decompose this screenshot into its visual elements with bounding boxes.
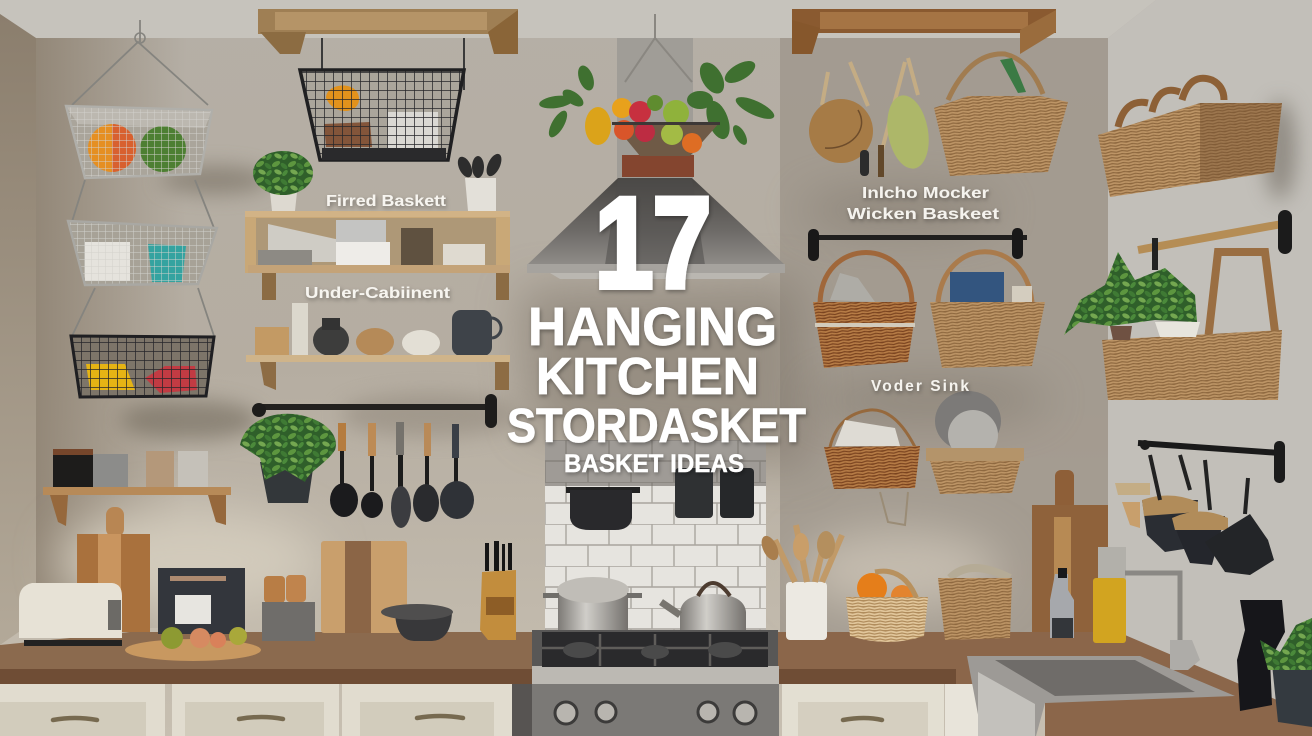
upper wooden wall shelf with dishes (245, 211, 510, 300)
wooden countertop (0, 632, 1312, 736)
toaster and appliances (19, 568, 315, 646)
main title: KITCHEN (536, 348, 759, 406)
wooden ceiling shelf right (792, 9, 1056, 54)
steel stock pot and kettle (543, 577, 746, 640)
black rail with two wicker baskets (808, 228, 1045, 368)
right wall rail with hanging pots (1115, 440, 1285, 575)
black pitcher and potted plant (1237, 600, 1312, 727)
black utensil rail with tools (252, 394, 497, 528)
cream lower cabinets (0, 684, 980, 736)
text label: fired basket: Firred Baskett (326, 193, 446, 210)
text label: inlcho mocker wicken baskeet: Wicken Baskeet (847, 206, 999, 223)
main title (507, 172, 806, 478)
orange basket and lidded basket (846, 568, 1012, 642)
wicker basket upper right (1098, 78, 1282, 197)
main title: STORDASKET (507, 400, 806, 453)
small potted plant on shelf (253, 151, 313, 211)
main title: BASKET IDEAS (564, 450, 744, 478)
knife block (480, 541, 516, 640)
bamboo rail with basket and plant (1064, 210, 1292, 400)
gourd and hanging items (809, 58, 934, 177)
wicker basket upper center (934, 54, 1068, 176)
bottles and faucet (1050, 547, 1200, 670)
wood board behind sink (1032, 470, 1108, 632)
cutting boards (77, 507, 407, 633)
cast iron pot (381, 604, 453, 641)
small wooden shelf with pots and jars (43, 449, 231, 526)
sink (967, 656, 1235, 736)
main title: HANGING (528, 297, 777, 357)
fruit basket on hood chimney (538, 14, 777, 156)
main title: 17 (595, 172, 711, 315)
utensil crock (758, 525, 842, 640)
tier 2 wire basket with cups (68, 221, 217, 285)
text label: inlcho mocker wicken baskeet (847, 185, 999, 223)
three-tier wire hanging basket (66, 20, 217, 397)
lower wooden wall shelf with jars (246, 303, 510, 390)
wicker baskets with plates (824, 391, 1024, 525)
wooden ceiling shelf left (258, 9, 518, 54)
hanging potted plant (240, 414, 336, 503)
text label: voder sink: Voder Sink (871, 378, 969, 395)
text label: inlcho mocker wicken baskeet: Inlcho Mocker (862, 185, 989, 202)
text label: under-cabinent: Under-Cabiinent (305, 285, 450, 302)
tile backsplash (545, 440, 766, 630)
tier 1 wire basket with fruit (66, 106, 212, 178)
gas stove (532, 630, 779, 736)
utensil cup on shelf (455, 152, 505, 211)
range hood (527, 38, 785, 279)
wooden board with fruit (125, 627, 261, 661)
tier 3 black wire basket with peppers (71, 336, 214, 397)
pots hanging on backsplash (566, 468, 754, 530)
black wire basket under shelf (300, 38, 464, 160)
